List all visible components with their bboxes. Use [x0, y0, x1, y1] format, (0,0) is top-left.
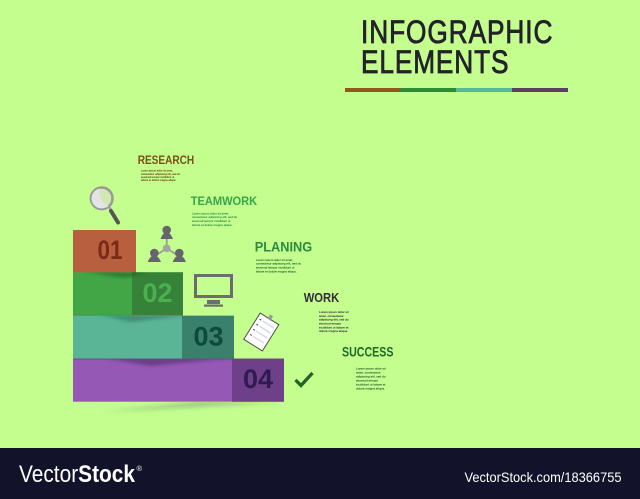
- icon: clipboard: [244, 310, 281, 351]
- title: ELEMENTS: [361, 46, 509, 81]
- text block: success: eiusmod tempor: [356, 378, 378, 382]
- text block: planing: [255, 240, 312, 274]
- text block: teamwork: consectetur adipiscing elit, sed do: [192, 215, 237, 219]
- text block: success: [342, 345, 394, 390]
- text block: work: incididunt ut labore et: [319, 325, 349, 329]
- step 04: 04: [243, 364, 273, 394]
- footer id: VectorStock.com/18366755: [464, 469, 622, 485]
- text block: planing: labore et dolore magna aliqua.: [256, 270, 297, 274]
- icon: computer monitor: [196, 276, 232, 307]
- text block: planing: eiusmod tempor incididunt ut: [256, 266, 295, 270]
- text block: work: adipiscing elit, sed do: [319, 318, 349, 322]
- text block: research: labore et dolore magna aliqua.: [141, 178, 176, 182]
- icon: magnifying glass: [91, 188, 118, 222]
- text block: success: SUCCESS: [342, 345, 394, 360]
- text block: research: eiusmod tempor incididunt ut: [141, 175, 174, 179]
- text block: success: Lorem ipsum dolor sit: [356, 367, 386, 371]
- step 03: 03: [193, 322, 224, 352]
- text block: research: consectetur adipiscing elit, sed do: [141, 172, 180, 176]
- step 01: [73, 230, 136, 272]
- text block: work: WORK: [304, 291, 339, 305]
- ground shadow: [120, 402, 266, 412]
- icon: check mark: [296, 373, 312, 386]
- footer bar: [0, 448, 640, 499]
- icon: team network: [148, 226, 186, 262]
- text block: research: Lorem ipsum dolor sit amet,: [141, 168, 173, 172]
- text block: work: amet, consectetur: [319, 314, 344, 318]
- text block: teamwork: Lorem ipsum dolor sit amet,: [192, 211, 229, 215]
- text block: work: dolore magna aliqua.: [319, 329, 348, 333]
- text block: research: [138, 155, 194, 182]
- text block: success: incididunt ut labore et: [356, 382, 386, 386]
- text block: teamwork: labore et dolore magna aliqua.: [192, 223, 233, 227]
- text block: success: dolore magna aliqua.: [356, 386, 385, 390]
- registered mark: ®: [136, 464, 142, 473]
- text block: success: amet, consectetur: [356, 370, 381, 374]
- step 03: [73, 315, 234, 359]
- text block: work: Lorem ipsum dolor sit: [319, 310, 349, 314]
- text block: planing: PLANING: [255, 240, 312, 255]
- footer logo: VectorStock: [19, 461, 136, 488]
- step 04: [73, 358, 284, 402]
- text block: planing: consectetur adipiscing elit, sed do: [256, 262, 301, 266]
- text block: research: RESEARCH: [138, 155, 194, 167]
- text block: work: [304, 291, 349, 333]
- text block: teamwork: TEAMWORK: [191, 196, 258, 208]
- step 02: [73, 272, 183, 315]
- step 02: 02: [142, 278, 173, 308]
- title color bar: [345, 88, 568, 92]
- step 01: 01: [98, 235, 122, 265]
- text block: teamwork: [191, 196, 258, 227]
- text block: success: adipiscing elit, sed do: [356, 374, 386, 378]
- title: INFOGRAPHIC: [361, 16, 552, 51]
- text block: teamwork: eiusmod tempor incididunt ut: [192, 219, 231, 223]
- title: [361, 16, 552, 81]
- text block: planing: Lorem ipsum dolor sit amet,: [256, 258, 293, 262]
- text block: work: eiusmod tempor: [319, 322, 341, 326]
